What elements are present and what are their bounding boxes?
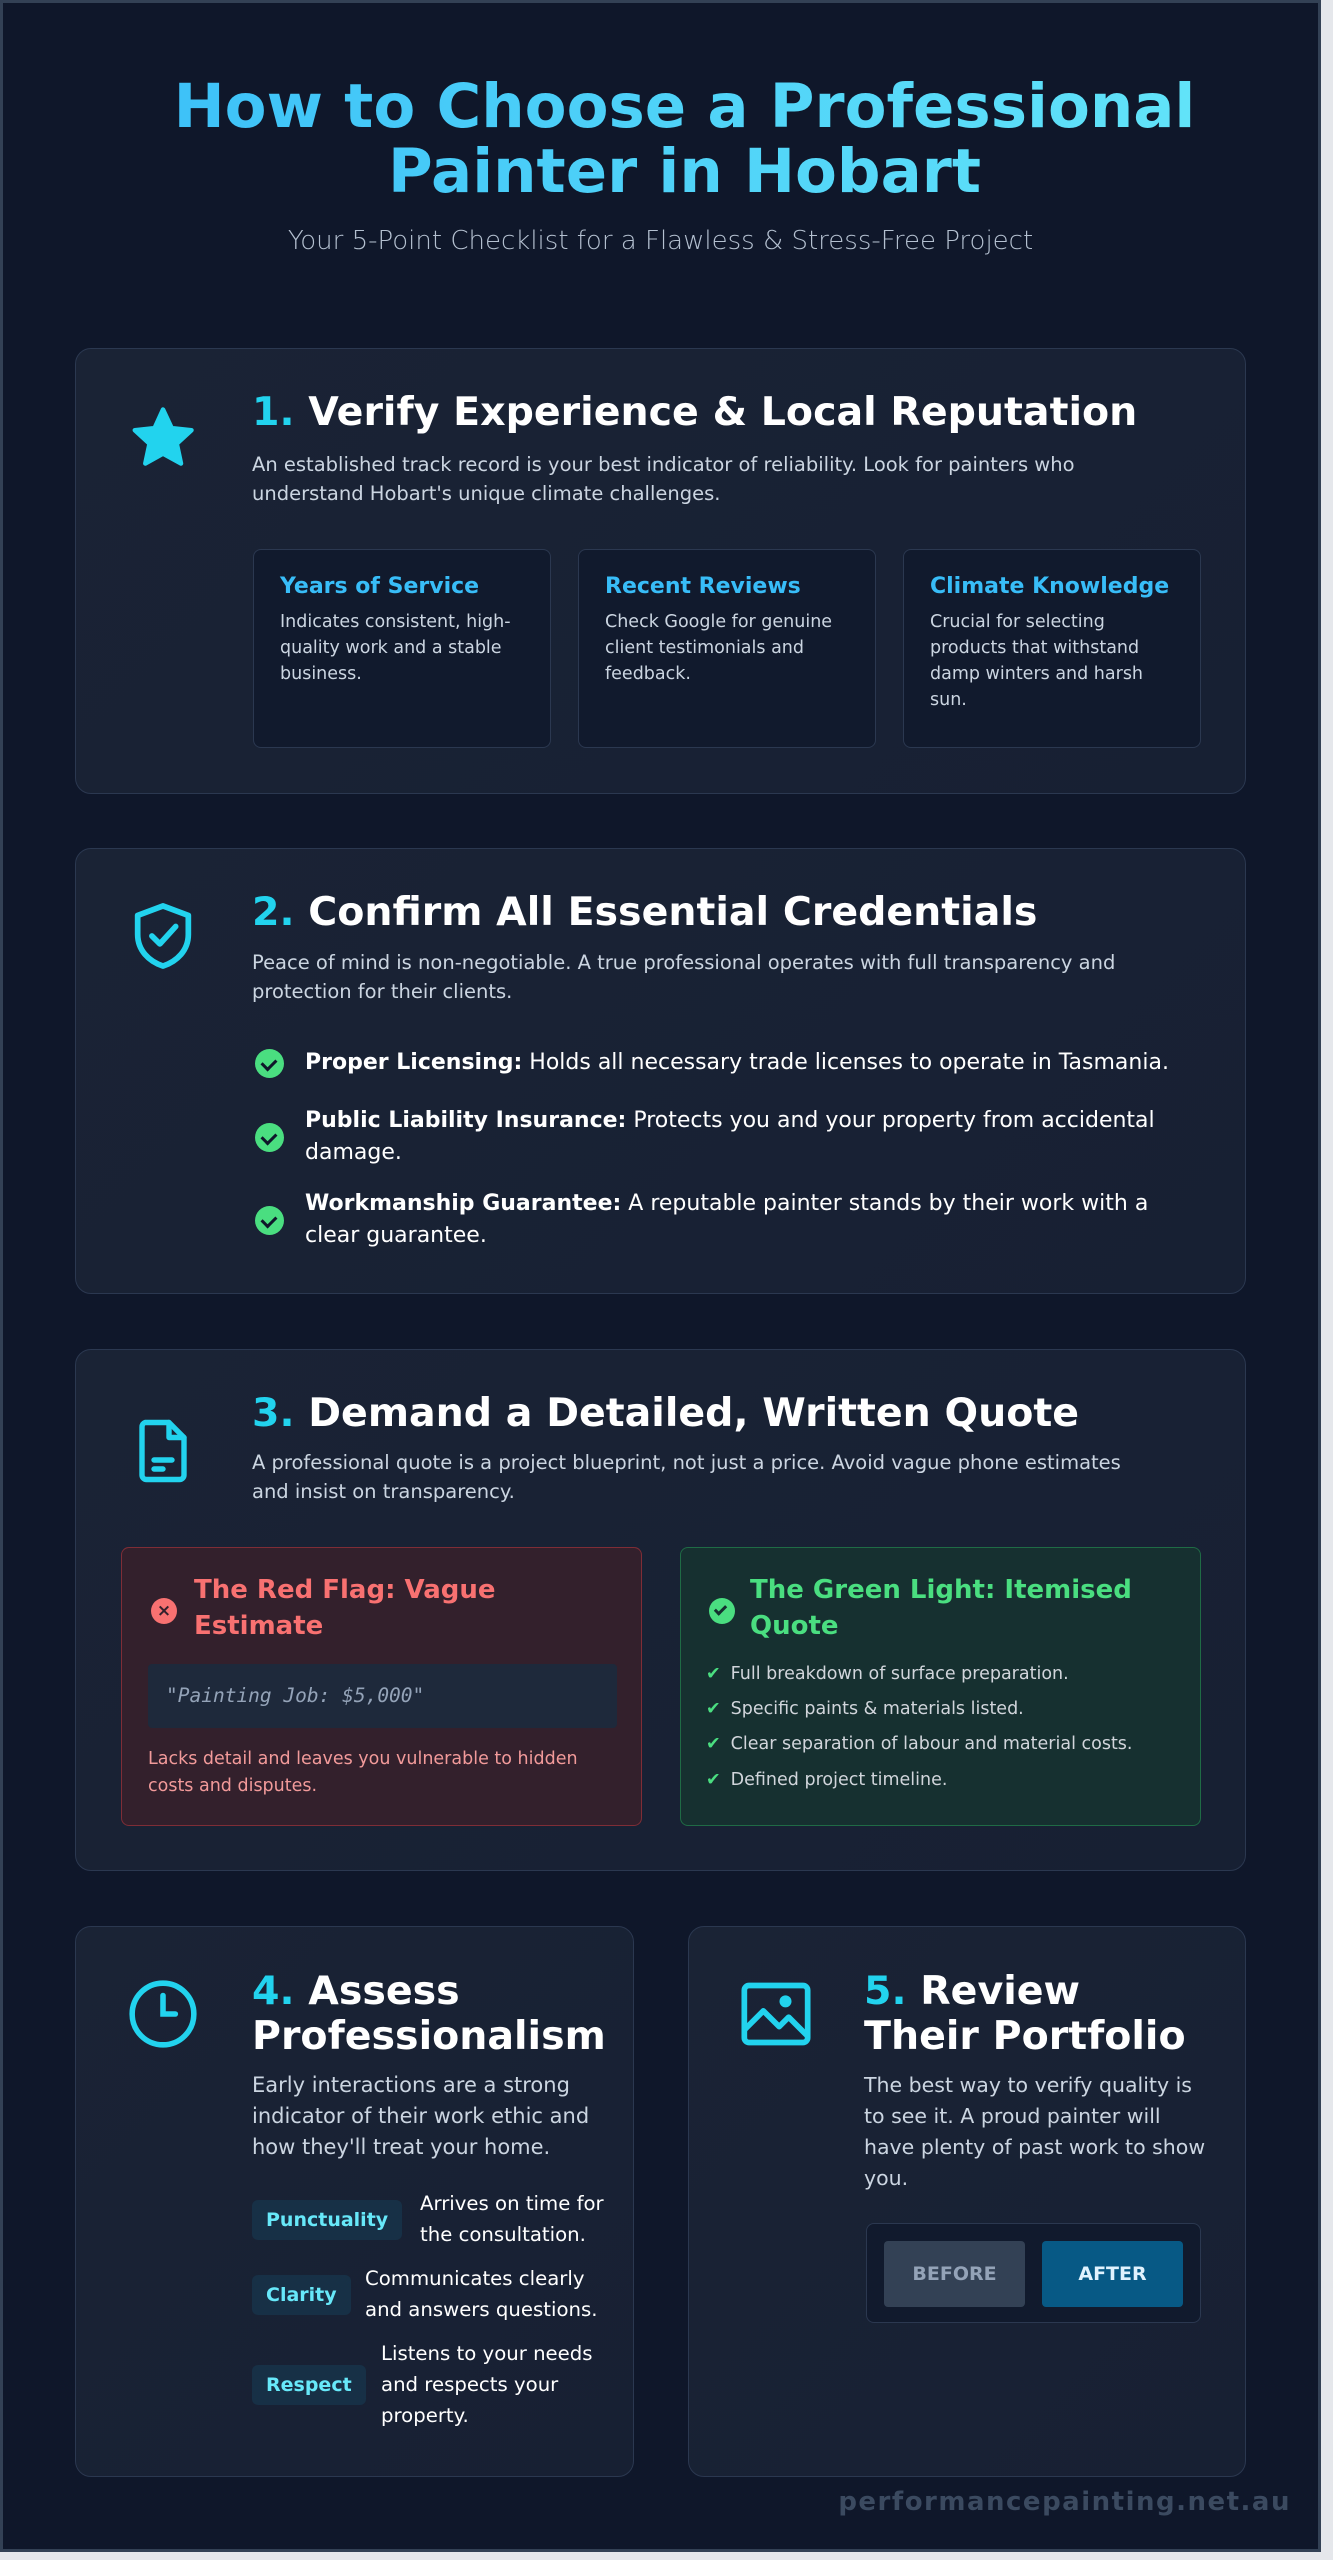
text: respect: and respects your	[381, 2373, 558, 2396]
icon: x: ×	[157, 1601, 171, 1621]
tag: punctuality: Punctuality	[266, 2209, 388, 2231]
title	[24, 74, 1333, 204]
check: insurance: Public Liability Insurance: Protects you and your property from accidental damage.	[305, 1108, 1155, 1165]
text: punctuality: Arrives on time for	[420, 2192, 604, 2215]
title: How to Choose a Professional	[174, 71, 1195, 142]
button: before: BEFORE	[912, 2263, 997, 2285]
panel: 3 quote	[75, 1349, 1246, 1871]
panel: 2 credentials	[75, 848, 1246, 1294]
text: punctuality: the consultation.	[420, 2223, 586, 2246]
text: ✔ Specific paints & materials listed.	[706, 1699, 1024, 1719]
card: climate: Crucial for selecting products that withstand damp winters and harsh sun.	[930, 612, 1143, 710]
green title	[750, 1575, 1132, 1641]
heading 4	[252, 1968, 606, 2059]
text: ✔ Defined project timeline.	[706, 1770, 947, 1790]
text: clarity: Communicates clearly	[365, 2267, 584, 2290]
footer url: performancepainting.net.au	[838, 2487, 1291, 2517]
icon: x	[151, 1598, 177, 1624]
card: years: Years of Service	[280, 574, 479, 599]
desc 1: An established track record is your best indicator of reliability. Look for painters who understand Hobart's unique climate challenges.	[252, 453, 1075, 505]
before/after widget	[866, 2223, 1201, 2323]
heading 4: Professionalism	[252, 2013, 606, 2059]
panel: 5 portfolio	[688, 1926, 1246, 2477]
card: reviews: Check Google for genuine client testimonials and feedback.	[605, 612, 832, 684]
icon: clock	[129, 1980, 197, 2048]
heading 5: 5. Review	[864, 1968, 1080, 2014]
card: years	[253, 549, 551, 748]
text: clarity: and answers questions.	[365, 2298, 598, 2321]
card: climate: Climate Knowledge	[930, 574, 1169, 599]
text: punctuality	[420, 2192, 604, 2246]
card: reviews	[578, 549, 876, 748]
red title: Estimate	[194, 1611, 323, 1641]
heading 2: 2. Confirm All Essential Credentials	[252, 889, 1037, 935]
icon: document	[139, 1420, 187, 1482]
button: after: AFTER	[1078, 2263, 1147, 2285]
panel: 4 professionalism	[75, 1926, 634, 2477]
icon: shield	[134, 903, 192, 969]
green light box	[680, 1547, 1201, 1826]
red title	[194, 1575, 496, 1641]
desc 5: The best way to verify quality is to see it. A proud painter will have plenty of past work to show you.	[864, 2073, 1205, 2190]
text: respect	[381, 2342, 593, 2427]
green list	[706, 1664, 1132, 1790]
red desc: Lacks detail and leaves you vulnerable to hidden costs and disputes.	[148, 1749, 578, 1796]
tag: respect	[252, 2365, 366, 2405]
card: reviews: Recent Reviews	[605, 574, 801, 599]
heading 4: 4. Assess	[252, 1968, 460, 2014]
desc 4: Early interactions are a strong indicator of their work ethic and how they'll treat your home.	[252, 2073, 589, 2159]
green title: Quote	[750, 1611, 839, 1641]
check: licensing: Proper Licensing: Holds all necessary trade licenses to operate in Tasmania.	[305, 1050, 1169, 1075]
card: years: Indicates consistent, high-quality work and a stable business.	[280, 612, 511, 684]
tag: clarity: Clarity	[266, 2284, 337, 2306]
check: guarantee: Workmanship Guarantee: A reputable painter stands by their work with a clear guarantee.	[305, 1191, 1148, 1248]
tag: respect: Respect	[266, 2374, 352, 2396]
heading 5: Their Portfolio	[864, 2013, 1186, 2059]
green title: The Green Light: Itemised	[750, 1575, 1132, 1605]
icon: check	[709, 1598, 735, 1624]
title: Painter in Hobart	[388, 136, 981, 207]
desc 3: A professional quote is a project blueprint, not just a price. Avoid vague phone estimates and insist on transparency.	[252, 1451, 1121, 1503]
tag: punctuality	[252, 2200, 402, 2240]
red flag box	[121, 1547, 642, 1826]
code box: "Painting Job: $5,000"	[166, 1684, 424, 1707]
panel: 1 experience	[75, 348, 1246, 794]
text: respect: property.	[381, 2404, 469, 2427]
heading 5	[864, 1968, 1186, 2059]
text: clarity	[365, 2267, 598, 2321]
text: respect: Listens to your needs	[381, 2342, 593, 2365]
icon: star	[132, 407, 194, 466]
icon: image	[742, 1982, 810, 2046]
button: after	[1042, 2241, 1183, 2307]
card: climate	[903, 549, 1201, 748]
heading 1: 1. Verify Experience & Local Reputation	[252, 389, 1137, 435]
heading 3: 3. Demand a Detailed, Written Quote	[252, 1390, 1079, 1436]
subtitle: Your 5-Point Checklist for a Flawless & Stress-Free Project	[288, 226, 1033, 256]
red title: The Red Flag: Vague	[194, 1575, 496, 1605]
button: before	[884, 2241, 1025, 2307]
text: ✔ Full breakdown of surface preparation.	[706, 1664, 1069, 1684]
tag: clarity	[252, 2275, 351, 2315]
desc 2: Peace of mind is non-negotiable. A true professional operates with full transparency and protection for their clients.	[252, 951, 1115, 1003]
text: ✔ Clear separation of labour and material costs.	[706, 1734, 1132, 1754]
code box	[148, 1664, 617, 1728]
